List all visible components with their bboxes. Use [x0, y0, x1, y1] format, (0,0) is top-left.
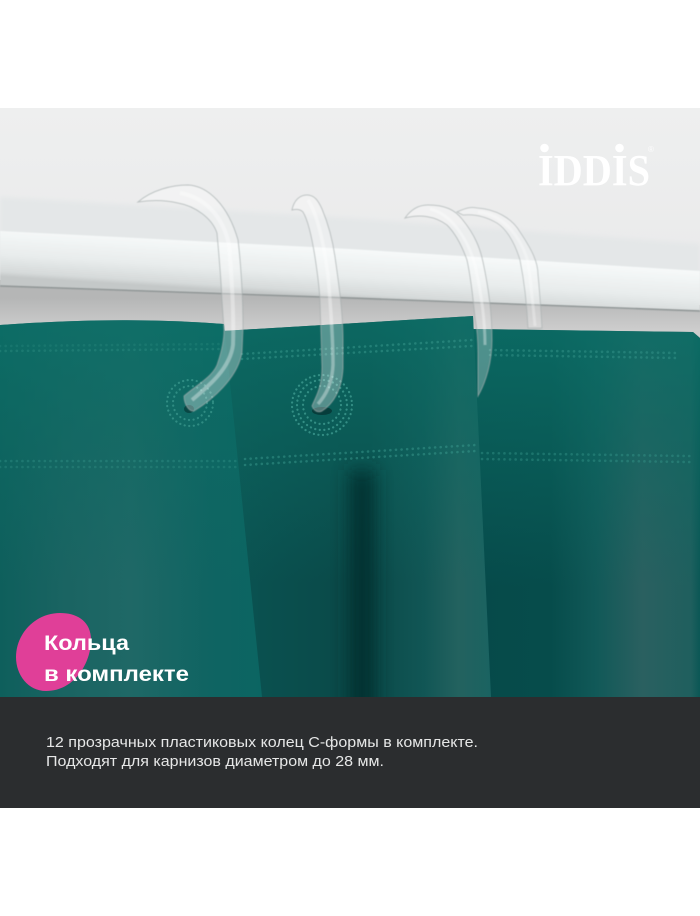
wall background: [0, 108, 700, 270]
description text: Подходят для карнизов диаметром до 28 мм.: [46, 753, 384, 770]
heading: rings included: Кольца: [44, 632, 129, 655]
description text: [46, 734, 478, 770]
eyelet: left: [167, 380, 213, 426]
photo: curtain on rod: [0, 108, 700, 730]
logo: IDDIS: IDDIS: [538, 146, 650, 195]
dark description panel: [0, 697, 700, 808]
eyelet: middle: [292, 375, 352, 435]
grey band under rod: [0, 280, 700, 338]
logo: IDDIS: ®: [648, 145, 654, 154]
curtain panel: middle: [222, 316, 491, 730]
heading: rings included: [46, 636, 188, 681]
white curtain rod: [0, 232, 700, 312]
curtain panel: right: [470, 329, 700, 697]
curtain panel: left: [0, 320, 262, 697]
ring 3: [405, 205, 492, 396]
ring 1: [138, 185, 243, 411]
heading: rings included: в комплекте: [44, 663, 189, 686]
stitching rows: [0, 340, 690, 467]
ring 2: [292, 195, 343, 412]
description text: 12 прозрачных пластиковых колец С-формы в комплекте.: [46, 734, 478, 751]
infographic: shower curtain rings: [0, 108, 700, 808]
pink blob: [16, 613, 91, 691]
ring 4: [457, 207, 542, 328]
